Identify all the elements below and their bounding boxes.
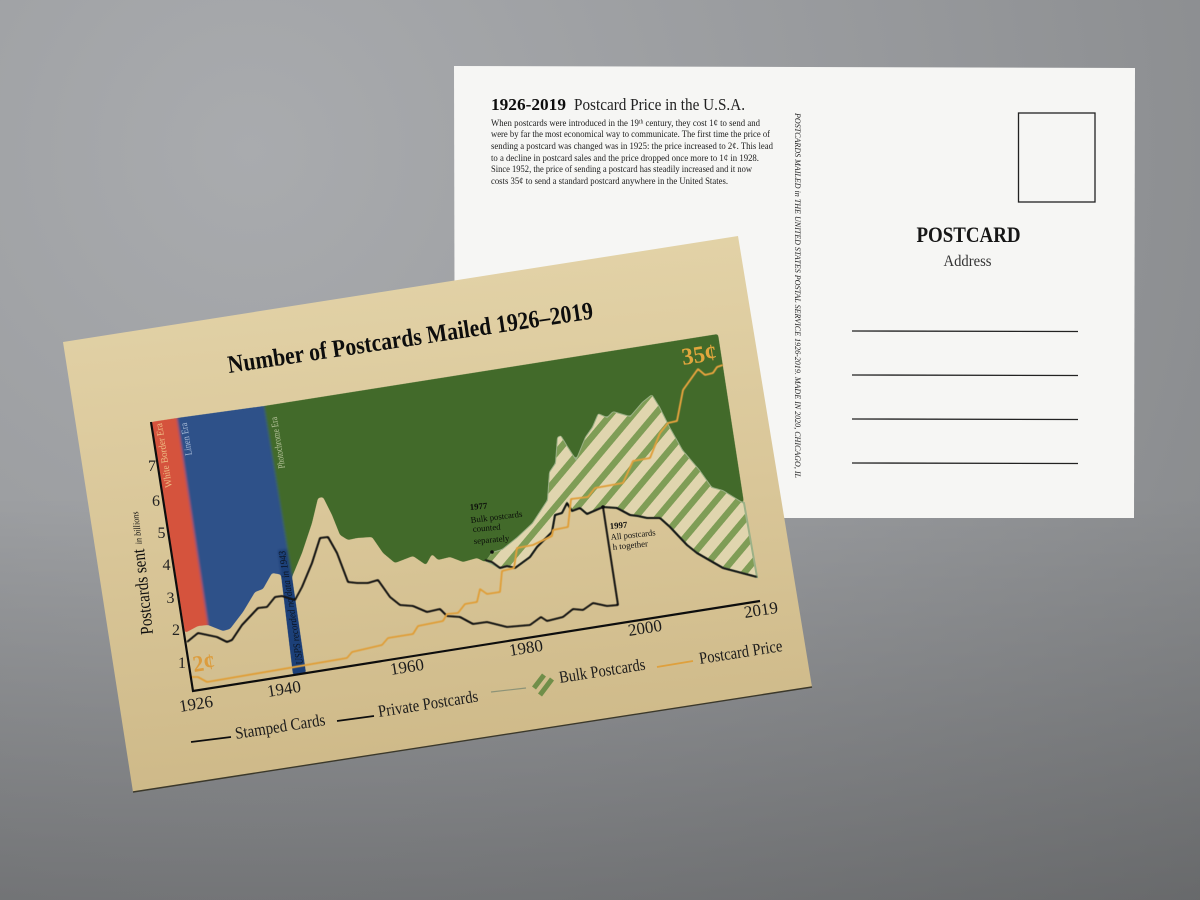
era label: photochrome: Photochrome Era bbox=[269, 416, 288, 469]
panel: front of postcard bbox=[63, 236, 812, 792]
text block: postcard price history: were by far the most economical way to communicate. The first time the price of bbox=[491, 129, 771, 140]
line: postcard price bbox=[190, 365, 723, 682]
price label: 2 cents: 2¢ bbox=[191, 649, 217, 677]
annotation: 1997: All postcards bbox=[610, 527, 657, 542]
band: white border era bbox=[151, 418, 208, 633]
panel: back of postcard bbox=[454, 66, 1135, 518]
address label: Address bbox=[944, 253, 992, 270]
y axis numbers: 3 bbox=[166, 590, 174, 607]
legend bbox=[191, 636, 784, 743]
era label: white border: White Border Era bbox=[154, 422, 175, 488]
y axis numbers: 6 bbox=[152, 493, 160, 510]
note: no data 1943: USPS recorded no data in 1943 bbox=[277, 550, 306, 665]
legend: bulk postcards: Bulk Postcards bbox=[558, 655, 647, 687]
y axis title: Postcards sent bbox=[128, 548, 157, 636]
legend: private postcards bbox=[337, 687, 479, 721]
y axis numbers: 4 bbox=[162, 557, 170, 574]
band: linen era bbox=[177, 406, 292, 631]
text block: postcard price history: sending a postcard was changed was in 1925: the price increased to 2¢. This lead bbox=[491, 141, 773, 152]
heading: postcard price: 1926-2019 bbox=[491, 95, 566, 114]
x axis years: 1940 bbox=[266, 677, 302, 701]
text block: postcard price history: to a decline in postcard sales and the price dropped once more to 1¢ in 1928. bbox=[491, 153, 759, 164]
legend: bulk postcards bbox=[491, 655, 647, 695]
era label: linen: Linen Era bbox=[179, 421, 195, 456]
stamp box bbox=[1018, 113, 1095, 202]
axes bbox=[151, 422, 760, 691]
vertical imprint text: POSTCARDS MAILED in THE UNITED STATES POSTAL SERVICE 1926-2019. MADE IN 2020, CHICAGO, IL bbox=[793, 112, 802, 479]
x axis years bbox=[178, 598, 779, 716]
x axis years: 1980 bbox=[508, 636, 544, 660]
text block: postcard price history bbox=[491, 118, 773, 187]
annotation: 1977: separately bbox=[473, 533, 510, 546]
chart fills bbox=[151, 334, 744, 675]
heading: postcard price bbox=[491, 95, 745, 114]
band: no data 1943 bbox=[278, 549, 306, 675]
legend: postcard price bbox=[657, 636, 784, 668]
address lines bbox=[852, 331, 1078, 464]
annotation: 1977: counted bbox=[472, 522, 502, 534]
y axis numbers: 7 bbox=[148, 458, 156, 475]
annotation: 1977: Bulk postcards bbox=[470, 509, 523, 525]
markers: annotation dots bbox=[490, 505, 605, 554]
annotation: 1997 bbox=[609, 519, 657, 552]
x axis years: 1926 bbox=[178, 692, 214, 716]
x axis years: 2019 bbox=[743, 598, 779, 622]
y axis title: in billions bbox=[131, 511, 145, 545]
annotation: 1997: 1997 bbox=[609, 519, 628, 531]
x axis years: 2000 bbox=[627, 616, 663, 640]
legend: postcard price: Postcard Price bbox=[698, 636, 784, 668]
y axis numbers: 2 bbox=[172, 622, 180, 639]
price label: 35 cents: 35¢ bbox=[680, 340, 719, 371]
legend: private postcards: Private Postcards bbox=[377, 687, 479, 721]
area: bulk postcards hatch bbox=[485, 394, 757, 577]
legend: stamped cards: Stamped Cards bbox=[234, 710, 327, 743]
text block: postcard price history: Since 1952, the price of sending a postcard has steadily increased and it now bbox=[491, 164, 752, 175]
x axis years: 1960 bbox=[389, 655, 425, 679]
text block: postcard price history: costs 35¢ to send a standard postcard anywhere in the United States. bbox=[491, 176, 728, 187]
y axis numbers: 1 bbox=[178, 655, 186, 672]
y axis numbers: 5 bbox=[158, 525, 166, 542]
text block: postcard price history: When postcards were introduced in the 19ᵗʰ century, they cost 1¢ to send and bbox=[491, 118, 760, 129]
legend: stamped cards bbox=[191, 710, 327, 743]
y axis numbers bbox=[148, 458, 186, 672]
annotation: 1977: 1977 bbox=[469, 500, 488, 512]
annotation: 1977 bbox=[469, 500, 523, 546]
line: stamped cards bbox=[187, 507, 618, 642]
band: photochrome era bbox=[264, 334, 744, 577]
title: Number of Postcards Mailed 1926–2019 bbox=[226, 298, 595, 379]
heading: postcard price: Postcard Price in the U.S.A. bbox=[574, 95, 745, 114]
postcard label: POSTCARD bbox=[916, 222, 1020, 247]
line: private postcards bbox=[485, 503, 757, 577]
annotation: 1997: h together bbox=[612, 538, 649, 552]
